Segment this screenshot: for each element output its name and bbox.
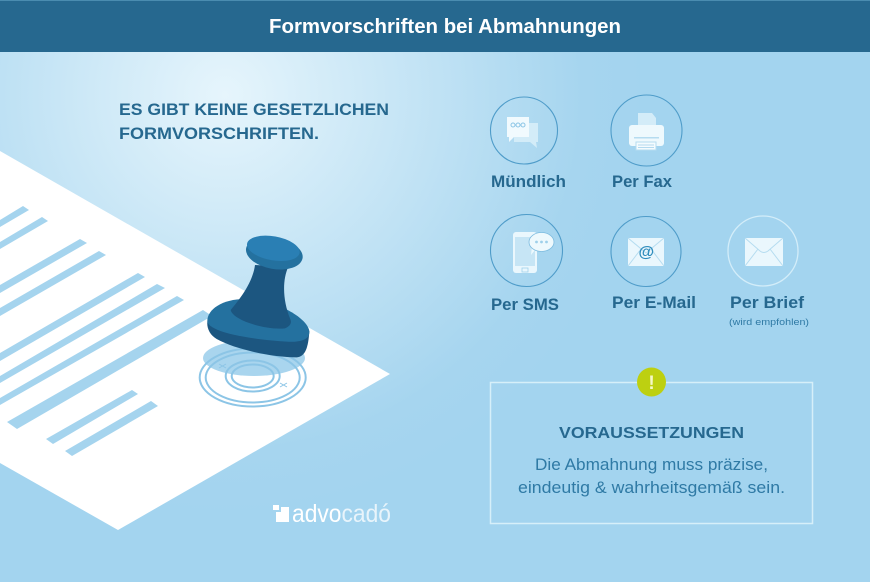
document sheet xyxy=(0,151,390,530)
panel text xyxy=(518,456,785,497)
stamp xyxy=(207,232,309,357)
icon: SMS xyxy=(490,214,562,286)
label: Per Brief: Per Brief xyxy=(730,293,804,312)
logo: advocado: advocadó xyxy=(292,500,391,528)
label: Per SMS: Per SMS xyxy=(491,295,559,314)
panel: Voraussetzungen xyxy=(490,368,812,524)
panel heading: VORAUSSETZUNGEN xyxy=(559,425,744,442)
title: Formvorschriften bei Abmahnungen xyxy=(269,16,621,38)
icon: E-Mail xyxy=(611,216,681,286)
label: Per E-Mail: Per E-Mail xyxy=(612,293,696,312)
icon: Fax xyxy=(611,95,682,166)
icon: exclamation xyxy=(637,368,666,396)
label: Per Brief: (wird empfohlen) xyxy=(729,317,809,328)
panel text: Die Abmahnung muss präzise, xyxy=(535,456,768,474)
header bar xyxy=(0,0,870,52)
stamp imprint xyxy=(200,340,306,406)
label: Per Fax: Per Fax xyxy=(612,172,673,191)
icon: Mündlich xyxy=(490,97,558,164)
stamp neck xyxy=(231,265,291,329)
heading xyxy=(119,100,389,143)
heading: FORMVORSCHRIFTEN. xyxy=(119,124,319,143)
icon: Brief xyxy=(728,216,798,286)
stamp base top xyxy=(207,299,309,342)
panel text: eindeutig & wahrheitsgemäß sein. xyxy=(518,479,785,497)
label: Mündlich: Mündlich xyxy=(491,172,566,191)
stamp knob xyxy=(243,233,305,274)
label: Per Brief xyxy=(729,293,809,328)
stamp base side xyxy=(207,322,309,357)
icon: exclamation: ! xyxy=(648,373,655,394)
icon: E-Mail: @ xyxy=(638,244,654,261)
heading: ES GIBT KEINE GESETZLICHEN xyxy=(119,100,389,119)
text lines on document xyxy=(0,206,212,456)
